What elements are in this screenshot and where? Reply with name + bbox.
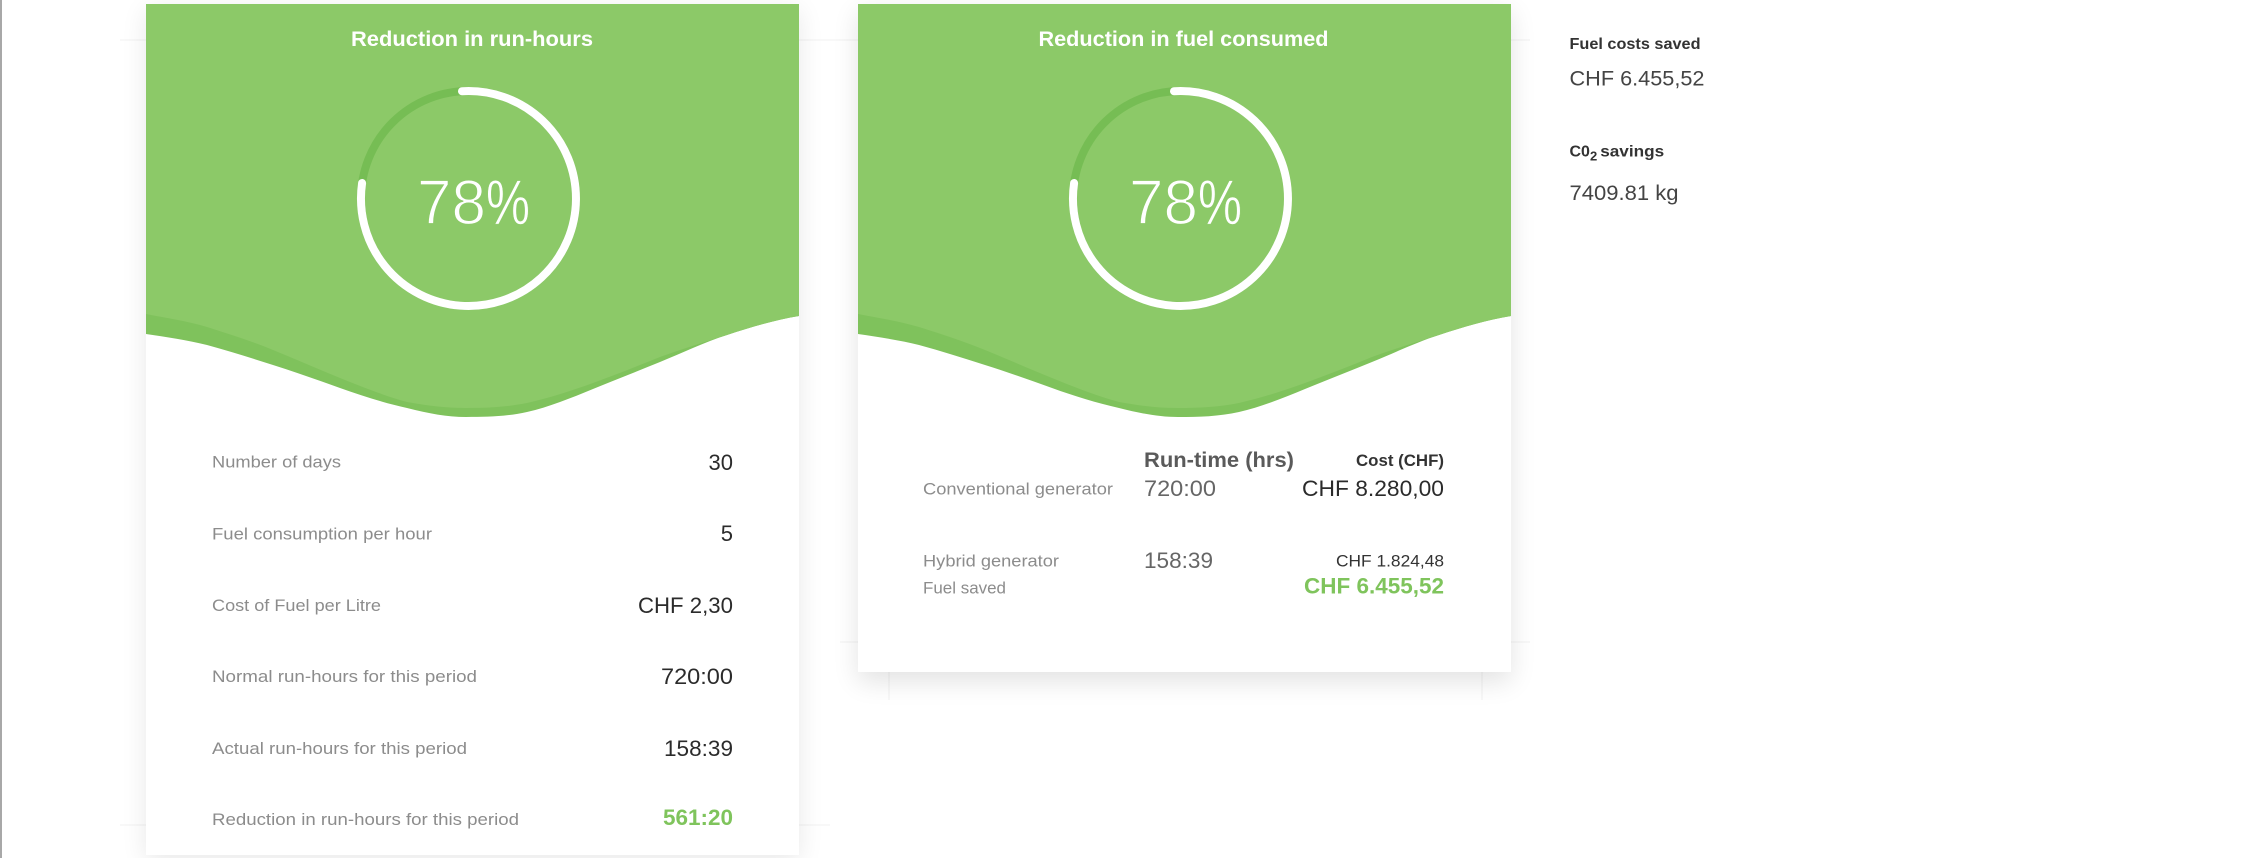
row: number of days: 30	[709, 450, 733, 475]
value: 78%	[1129, 168, 1242, 238]
progress ring 78%	[1073, 91, 1288, 306]
row: normal run-hours	[212, 664, 733, 689]
row: reduction in run-hours	[212, 805, 733, 830]
row: normal run-hours: 720:00	[661, 664, 733, 689]
summary: CO2 savings: 7409.81 kg	[1570, 182, 1678, 205]
progress ring 78%	[361, 91, 576, 306]
row: actual run-hours: 158:39	[664, 736, 733, 761]
row: cost of fuel per litre: Cost of Fuel per Litre	[212, 596, 381, 615]
row: hybrid generator: 158:39	[1144, 548, 1213, 573]
summary: CO2 savings: C0	[1570, 144, 1590, 160]
column heading: cost: Cost (CHF)	[1356, 451, 1444, 470]
row: hybrid generator: CHF 1.824,48	[1336, 552, 1444, 570]
value: 78%: 78	[1129, 168, 1198, 238]
row: conventional generator: Conventional generator	[923, 480, 1113, 498]
row: fuel consumption per hour: Fuel consumption per hour	[212, 524, 432, 544]
summary: fuel costs saved: Fuel costs saved	[1570, 36, 1700, 53]
column heading: run-time: Run-time (hrs)	[1144, 449, 1294, 472]
row: reduction in run-hours: 561:20	[663, 805, 733, 830]
row: reduction in run-hours: Reduction in run-hours for this period	[212, 810, 519, 829]
row: normal run-hours: Normal run-hours for this period	[212, 667, 477, 686]
value: 78%: %	[486, 168, 530, 238]
row: cost of fuel per litre	[212, 593, 733, 618]
row: actual run-hours	[212, 736, 733, 761]
header band with wave	[146, 4, 799, 417]
row: fuel saved: CHF 6.455,52	[1304, 574, 1444, 598]
header band with wave	[858, 4, 1511, 417]
row: actual run-hours: Actual run-hours for this period	[212, 739, 467, 758]
row: hybrid generator	[923, 548, 1444, 573]
heading: reduction in fuel consumed: Reduction in fuel consumed	[1038, 28, 1328, 51]
row: number of days	[212, 450, 733, 475]
row: fuel consumption per hour	[212, 521, 733, 546]
row: hybrid generator: Hybrid generator	[923, 552, 1059, 570]
row: conventional generator	[923, 476, 1444, 501]
summary: CO2 savings: savings	[1600, 144, 1664, 160]
row: conventional generator: CHF 8.280,00	[1302, 476, 1444, 501]
panel: reduction in run-hours	[146, 4, 799, 858]
row: number of days: Number of days	[212, 452, 341, 472]
summary: fuel costs saved: CHF 6.455,52	[1570, 68, 1704, 90]
row: conventional generator: 720:00	[1144, 476, 1216, 501]
row: fuel saved: Fuel saved	[923, 578, 1006, 598]
heading: reduction in run-hours: Reduction in run-hours	[351, 28, 593, 51]
row: cost of fuel per litre: CHF 2,30	[638, 593, 733, 618]
summary: fuel costs saved	[1570, 36, 1704, 90]
row: fuel saved	[923, 574, 1444, 598]
summary: CO2 savings: 2	[1590, 148, 1597, 164]
value: 78%: 78	[417, 168, 486, 238]
value: 78%: %	[1198, 168, 1242, 238]
value: 78%	[417, 168, 530, 238]
summary: CO2 savings	[1570, 144, 1678, 205]
row: fuel consumption per hour: 5	[721, 521, 733, 546]
panel: reduction in fuel consumed	[858, 4, 1511, 682]
